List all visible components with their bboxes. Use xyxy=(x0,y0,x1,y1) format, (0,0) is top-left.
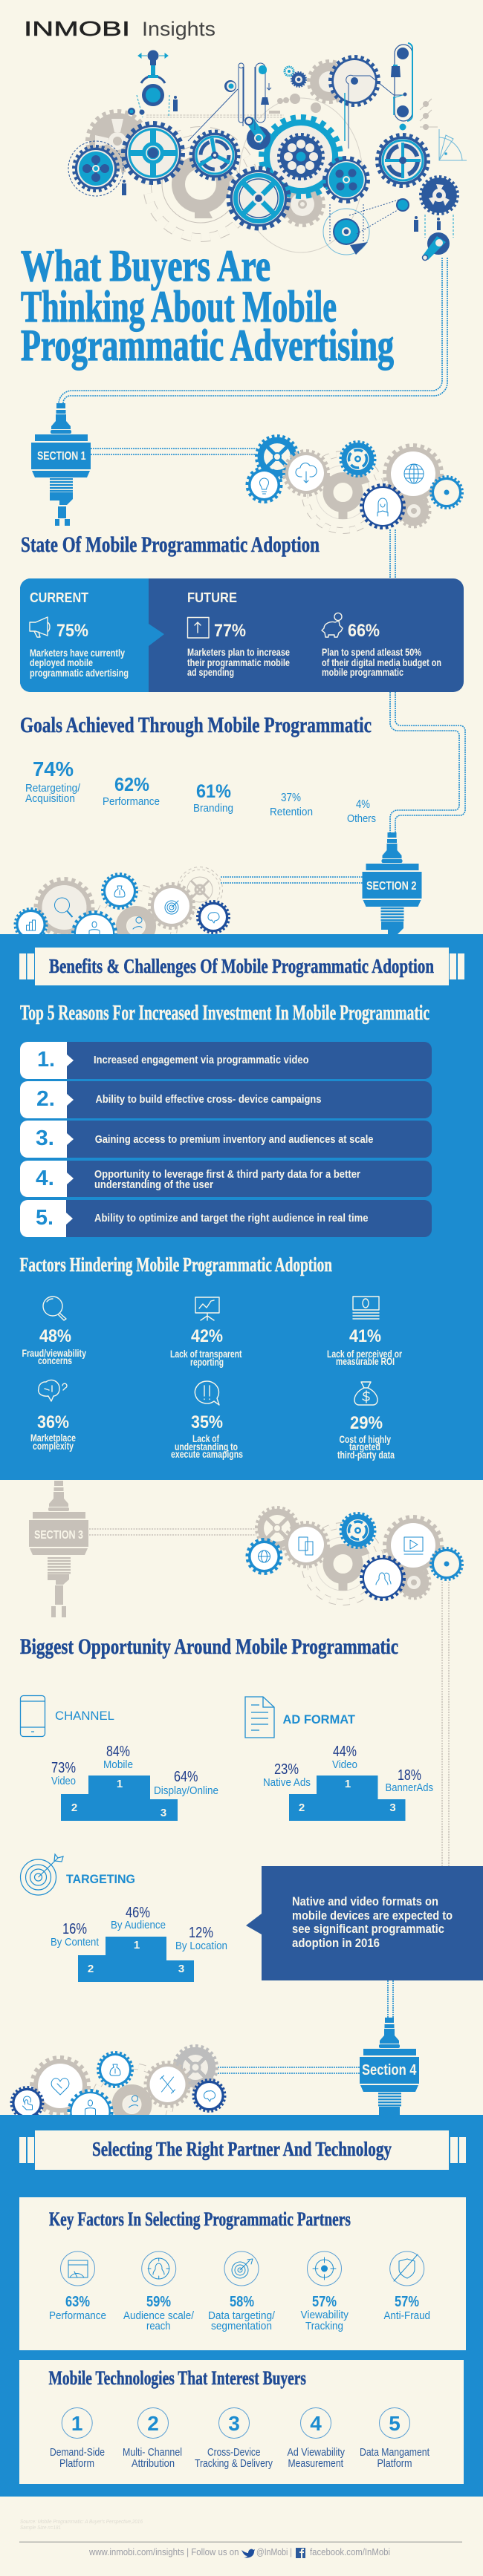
factor 29: Cost of highly xyxy=(339,1434,391,1445)
small grey gear xyxy=(398,495,429,526)
ad format values: 18% xyxy=(398,1767,421,1784)
list: top 5 reasons xyxy=(20,1042,432,1237)
tech 2: Multi- Channel xyxy=(123,2447,182,2459)
ad format label: AD FORMAT xyxy=(282,1712,356,1726)
factor: audience xyxy=(123,2251,195,2332)
chart gear xyxy=(16,909,46,940)
outline gear xyxy=(306,455,380,529)
grey gear bottom xyxy=(282,183,323,225)
factor 41: measurable ROI xyxy=(336,1356,395,1367)
connector: section 1 to gears xyxy=(91,449,256,454)
handshake gear xyxy=(33,2058,88,2113)
factor: targeting: 58% xyxy=(230,2294,254,2310)
callout: see significant programmatic xyxy=(292,1923,444,1936)
channel values: Display/Online xyxy=(154,1784,218,1797)
panel: selecting partner xyxy=(0,2115,483,2497)
title xyxy=(21,241,394,370)
factor: performance: 63% xyxy=(65,2294,90,2310)
connector: state panel to section 2 xyxy=(390,692,465,833)
factor: viewability: Tracking xyxy=(305,2320,343,2332)
source note: Source: Mobile Programmatic: A Buyer's Perspective,2016 xyxy=(20,2518,143,2525)
factor 48: Fraud/viewability xyxy=(22,1348,86,1359)
reason 2: 2. xyxy=(36,1087,55,1111)
right belt pulleys xyxy=(393,43,412,131)
icon: document xyxy=(245,1697,274,1738)
panel background xyxy=(20,578,464,692)
icon: megaphone xyxy=(30,617,50,637)
channel values: 64% xyxy=(174,1769,198,1785)
ad format values xyxy=(263,1744,433,1794)
tech 3: Tracking & Delivery xyxy=(195,2458,273,2470)
people gear xyxy=(362,1557,403,1599)
outline gear xyxy=(179,869,221,910)
podium numbers: 2 xyxy=(299,1801,305,1814)
illustration: machine of gears xyxy=(68,43,467,260)
factor 42: reporting xyxy=(190,1357,224,1368)
title: What Buyers Are xyxy=(21,241,270,290)
factor 42: Lack of transparent xyxy=(170,1349,242,1360)
banner: benefits and challenges xyxy=(19,948,464,985)
hub gear xyxy=(99,889,173,963)
icon: facebook xyxy=(296,2548,305,2558)
podium xyxy=(289,1776,406,1821)
factor: anti-fraud xyxy=(383,2251,430,2322)
callout xyxy=(246,1866,483,1980)
section 1 label: SECTION 1 xyxy=(37,450,86,463)
reason 3: 3. xyxy=(36,1126,54,1150)
ad format values: Video xyxy=(332,1758,357,1771)
factor: audience: 59% xyxy=(146,2294,171,2310)
tech 2 xyxy=(123,2407,182,2470)
channel values xyxy=(51,1744,218,1797)
grey gear left xyxy=(88,112,146,170)
targeting values xyxy=(51,1905,227,1952)
factor 48 xyxy=(22,1297,86,1366)
small blue gear with dashed ring xyxy=(68,141,123,196)
stat 75: 75% xyxy=(56,621,88,641)
spinning ball weights xyxy=(269,94,438,130)
reason 1: 1. xyxy=(37,1048,55,1072)
icon: up arrow box xyxy=(187,618,209,638)
connector: gears to state panel xyxy=(390,529,395,578)
podium xyxy=(78,1937,194,1982)
factor 42: 42% xyxy=(191,1326,223,1346)
tech 1: Platform xyxy=(59,2458,94,2470)
tech 4: Ad Viewability xyxy=(287,2447,346,2459)
ad format values: 23% xyxy=(274,1761,299,1778)
tech 5: Platform xyxy=(377,2458,412,2470)
card: mobile technologies xyxy=(19,2360,464,2484)
factor 35: Lack of xyxy=(192,1433,219,1444)
current text xyxy=(30,648,129,679)
heading: factors hindering: Factors Hindering Mobile Programmatic Adoption xyxy=(19,1253,332,1276)
navy gear spoked xyxy=(192,132,238,178)
reason 1 xyxy=(20,1042,432,1079)
factor 29: third-party data xyxy=(337,1450,395,1461)
tech 5: 5 xyxy=(389,2412,401,2435)
goal 74: Retargeting/ xyxy=(25,782,81,795)
ad format values: BannerAds xyxy=(385,1781,433,1794)
callout: Native and video formats on xyxy=(292,1895,438,1908)
targeting values: 46% xyxy=(126,1905,150,1921)
stat 77: 77% xyxy=(214,621,246,641)
connector: title to section 1 xyxy=(59,258,447,403)
connector: callout to section 4 xyxy=(388,1980,393,2018)
factor: targeting: segmentation xyxy=(211,2320,272,2332)
current text: programmatic advertising xyxy=(30,668,129,679)
reason 4: Opportunity to leverage first & third party data for a better xyxy=(94,1169,360,1181)
icon: twitter xyxy=(242,2549,255,2558)
connector: section 3 to gears xyxy=(89,1529,256,1535)
goal 4 xyxy=(347,798,376,825)
factor: audience: Audience scale/ xyxy=(123,2309,195,2322)
future heading: FUTURE xyxy=(187,590,237,605)
factor 35: 35% xyxy=(191,1412,223,1432)
belts and wires xyxy=(137,63,405,149)
goal 74: 74% xyxy=(33,757,74,780)
source note xyxy=(20,2518,143,2531)
money bag gear xyxy=(103,875,137,907)
future text 1: ad spending xyxy=(187,667,234,678)
tech 4 xyxy=(287,2407,346,2470)
lower pulley with sector xyxy=(323,198,409,255)
reason 5: Ability to optimize and target the right audience in real time xyxy=(94,1213,369,1225)
section 1 plug xyxy=(31,403,91,526)
current column xyxy=(20,578,164,692)
tech 1: 1 xyxy=(71,2412,82,2435)
factor: targeting: Data targeting/ xyxy=(208,2309,276,2322)
reason 3 xyxy=(20,1121,432,1158)
card: key factors xyxy=(19,2197,466,2350)
factor 36 xyxy=(30,1380,76,1452)
future text 2 xyxy=(322,647,441,678)
factor 36: 36% xyxy=(37,1412,69,1432)
factor 36: complexity xyxy=(33,1441,74,1452)
stat 66: 66% xyxy=(348,621,380,641)
targeting values: By Location xyxy=(175,1940,227,1952)
pulley on stem xyxy=(128,65,267,115)
factor: targeting xyxy=(208,2251,276,2332)
factor: audience: reach xyxy=(146,2320,171,2332)
right gears xyxy=(378,136,427,185)
target gear xyxy=(150,884,193,927)
factor 29: 29% xyxy=(350,1413,383,1433)
reason 3: Gaining access to premium inventory and audiences at scale xyxy=(95,1134,373,1146)
factor: viewability: 57% xyxy=(312,2294,337,2310)
quadrant dial xyxy=(439,129,467,160)
channel block xyxy=(21,1696,218,1821)
top navy gear with pulley lines xyxy=(331,58,377,104)
section 3 gear cluster xyxy=(247,1508,462,1601)
blue gear right xyxy=(431,477,462,508)
factor 36: Marketplace xyxy=(30,1432,76,1444)
goal 62: 62% xyxy=(114,775,149,795)
targeting values: 12% xyxy=(189,1925,213,1941)
ad format values: Native Ads xyxy=(263,1776,311,1789)
factor 48: concerns xyxy=(38,1355,72,1366)
tech 3 xyxy=(195,2407,273,2470)
title: Thinking About Mobile xyxy=(21,282,337,331)
section 2 plug xyxy=(363,832,422,934)
teal big gear xyxy=(263,119,339,195)
targeting values: 16% xyxy=(62,1921,87,1937)
goals stats xyxy=(25,757,376,825)
current heading: CURRENT xyxy=(30,590,88,605)
podium numbers: 3 xyxy=(178,1963,184,1975)
goal 61: 61% xyxy=(196,781,231,802)
heading: state of adoption: State Of Mobile Programmatic Adoption xyxy=(21,532,320,557)
future text 1 xyxy=(187,647,290,678)
blue gear right xyxy=(431,1548,462,1579)
navy gear bottom centre xyxy=(230,169,288,227)
connector: section 3 to callout xyxy=(442,1582,449,1866)
factor 29 xyxy=(337,1382,395,1461)
goal 37: 37% xyxy=(281,792,301,804)
blue ring gear xyxy=(341,1513,375,1548)
dashed rail xyxy=(146,115,284,117)
section 4 gear cluster xyxy=(12,2047,224,2142)
footer links: www.inmobi.com/insights | Follow us on xyxy=(88,2546,239,2557)
ad format values: 44% xyxy=(333,1744,357,1760)
factor: viewability: Viewability xyxy=(300,2309,349,2321)
podium numbers: 3 xyxy=(161,1807,166,1819)
goal 37: Retention xyxy=(270,806,313,818)
factor 48: 48% xyxy=(39,1326,71,1346)
future text 1: Marketers plan to increase xyxy=(187,647,290,658)
factor 35: understanding to xyxy=(175,1441,238,1452)
reason 4 xyxy=(20,1161,432,1197)
section 4 label: Section 4 xyxy=(362,2062,417,2078)
globe gear xyxy=(386,446,441,501)
grey cross gear xyxy=(257,1508,297,1548)
tech 2: 2 xyxy=(147,2412,159,2435)
footer links xyxy=(88,2546,390,2558)
teal-navy gear with blades xyxy=(325,159,367,200)
targeting values: By Audience xyxy=(111,1919,166,1931)
goal 62: Performance xyxy=(103,795,160,808)
tech 4: 4 xyxy=(310,2412,322,2435)
podium numbers: 2 xyxy=(71,1801,77,1814)
goal 61: Branding xyxy=(193,802,233,815)
goal 74 xyxy=(25,757,81,805)
goal 4: 4% xyxy=(356,798,370,811)
heading: key factors: Key Factors In Selecting Programmatic Partners xyxy=(49,2208,351,2230)
factor: performance: Performance xyxy=(49,2309,106,2322)
person gear xyxy=(74,913,115,954)
bulb gear xyxy=(247,469,281,501)
section 3 plug xyxy=(29,1481,88,1617)
grey gear top xyxy=(309,62,349,102)
goal 74: Acquisition xyxy=(25,792,75,805)
factor 41: Lack of perceived or xyxy=(327,1349,403,1360)
factor 41: 41% xyxy=(349,1326,381,1346)
grey solid gear xyxy=(175,2047,216,2088)
podium numbers xyxy=(299,1778,396,1814)
lever on top xyxy=(138,50,168,106)
callout: adoption in 2016 xyxy=(292,1937,380,1950)
person gear xyxy=(362,486,403,527)
reason 4: understanding of the user xyxy=(94,1179,213,1191)
heading: goals: Goals Achieved Through Mobile Programmatic xyxy=(20,713,372,737)
tech 1 xyxy=(50,2407,105,2470)
footer rule xyxy=(19,2541,462,2543)
banner: selecting partner xyxy=(19,2130,466,2170)
panel: current and future xyxy=(20,578,464,692)
bottom right crank xyxy=(422,215,453,260)
section 2 gear cluster xyxy=(16,869,229,963)
podium numbers: 2 xyxy=(88,1963,94,1975)
future text 1: their programmatic mobile xyxy=(187,657,290,668)
logo xyxy=(24,17,215,40)
hub gear xyxy=(95,2067,169,2142)
future text 2: Plan to spend atleast 50% xyxy=(322,647,421,658)
future text 2: mobile programmatic xyxy=(322,667,403,678)
factor 35: execute camapigns xyxy=(171,1449,243,1460)
ad format block xyxy=(245,1697,433,1821)
channel label: CHANNEL xyxy=(55,1709,114,1723)
connector: section 4 to gears xyxy=(218,2067,360,2073)
connector: section 2 to gears xyxy=(221,877,363,883)
targeting label: TARGETING xyxy=(66,1872,135,1886)
thin guide oval xyxy=(239,98,363,252)
person gear xyxy=(70,2091,111,2133)
blue cross gear xyxy=(257,437,297,477)
tech 5 xyxy=(360,2407,429,2470)
tech 3: Cross-Device xyxy=(207,2447,260,2459)
hand gear xyxy=(12,2087,42,2119)
icon: phone xyxy=(21,1696,45,1736)
podium xyxy=(61,1776,178,1821)
tech 3: 3 xyxy=(228,2412,240,2435)
banner: selecting partner: Selecting The Right Partner And Technology xyxy=(92,2138,392,2160)
money bag gear xyxy=(98,2052,132,2087)
big navy gear left xyxy=(124,124,182,182)
targeting values: By Content xyxy=(51,1936,100,1949)
reason 4: 4. xyxy=(36,1167,54,1190)
goal 61 xyxy=(193,781,233,815)
current text: deployed mobile xyxy=(30,657,93,668)
section 2 label: SECTION 2 xyxy=(366,880,417,893)
factor: anti-fraud: 57% xyxy=(395,2294,419,2310)
factor: performance xyxy=(49,2251,106,2322)
tech 1: Demand-Side xyxy=(50,2447,105,2459)
outline gear xyxy=(306,1527,380,1601)
reason 2 xyxy=(20,1081,432,1118)
tech 4: Measurement xyxy=(288,2458,343,2470)
factor 41 xyxy=(327,1297,403,1367)
podium numbers xyxy=(71,1778,166,1819)
factor 29: targeted xyxy=(349,1441,380,1452)
small grey gear xyxy=(398,1567,429,1598)
magnifier gear xyxy=(37,880,91,935)
callout: mobile devices are expected to xyxy=(292,1909,453,1923)
globe gear xyxy=(247,1540,281,1573)
podium numbers: 3 xyxy=(389,1801,396,1814)
blue ring gear xyxy=(341,443,375,475)
footer links: @InMobi | xyxy=(256,2546,292,2557)
podium numbers xyxy=(88,1939,184,1975)
small cogs and weights xyxy=(261,65,401,105)
video gear xyxy=(386,1518,441,1573)
tiny figures xyxy=(122,96,441,232)
tech 5: Data Mangament xyxy=(360,2447,429,2459)
brain gear xyxy=(194,2080,224,2111)
brain gear xyxy=(198,901,229,933)
logo: Insights xyxy=(142,18,215,40)
goal 4: Others xyxy=(347,812,376,825)
heading: mobile technologies: Mobile Technologies That Interest Buyers xyxy=(49,2367,306,2389)
channel values: Video xyxy=(51,1775,76,1787)
panel: benefits and challenges xyxy=(0,934,483,1480)
lever with cam xyxy=(245,117,270,150)
dark gear right xyxy=(421,177,457,213)
factor: anti-fraud: Anti-Fraud xyxy=(383,2309,430,2322)
current text: Marketers have currently xyxy=(30,648,125,659)
reason 5 xyxy=(20,1200,432,1237)
factor 42 xyxy=(170,1297,242,1368)
reason 5: 5. xyxy=(36,1206,54,1230)
podium numbers: 1 xyxy=(134,1939,140,1951)
source note: Sample Size n=181 xyxy=(20,2524,61,2531)
section 1 gear cluster xyxy=(247,437,462,529)
podium numbers: 1 xyxy=(345,1778,351,1790)
section 4 plug xyxy=(360,2018,419,2115)
section 3 label: SECTION 3 xyxy=(34,1529,83,1542)
channel values: 73% xyxy=(51,1760,76,1776)
channel values: 84% xyxy=(106,1744,130,1760)
future text 2: of their digital media budget on xyxy=(322,657,441,668)
goal 37 xyxy=(270,792,313,818)
podium numbers: 1 xyxy=(117,1778,123,1790)
reason 2: Ability to build effective cross- device campaigns xyxy=(95,1094,321,1106)
targeting block xyxy=(21,1854,227,1982)
icon: target xyxy=(21,1854,63,1895)
channel values: Mobile xyxy=(103,1758,133,1771)
icon: piggy bank xyxy=(322,613,343,637)
factors grid xyxy=(22,1297,403,1461)
goal 62 xyxy=(103,775,160,808)
factor 35 xyxy=(171,1381,243,1460)
footer links: facebook.com/InMobi xyxy=(310,2546,390,2557)
tools gear xyxy=(146,2063,189,2106)
large outline gear xyxy=(149,133,252,235)
logo: INMOBI xyxy=(24,17,130,40)
factor: viewability xyxy=(300,2251,349,2332)
tech 2: Attribution xyxy=(132,2458,175,2470)
cloud gear xyxy=(285,451,328,495)
devices gear xyxy=(285,1523,328,1566)
reason 1: Increased engagement via programmatic video xyxy=(94,1054,309,1066)
